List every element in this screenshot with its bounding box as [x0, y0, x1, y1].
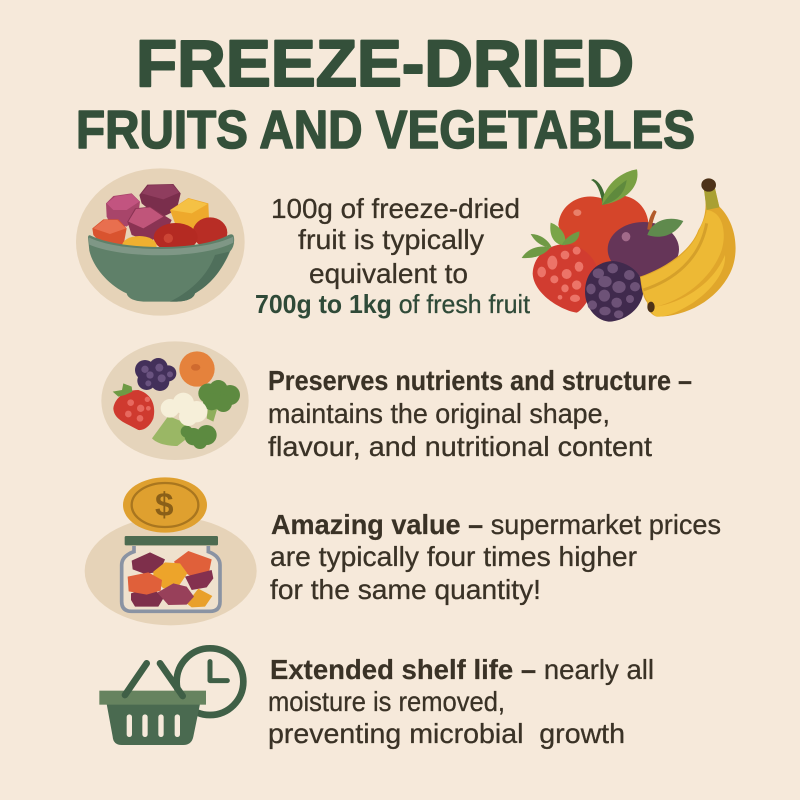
- text block: amazing value: for the same quantity!: [270, 574, 541, 605]
- text block: extended shelf life: preventing microbial growth: [268, 718, 625, 749]
- text block: weight equivalence: equivalent to: [309, 258, 468, 289]
- text block: amazing value: are typically four times higher: [270, 541, 637, 572]
- text block: weight equivalence: 700g to 1kg of fresh fruit: [255, 289, 531, 319]
- jar: [122, 536, 220, 611]
- text block: weight equivalence: 100g of freeze-dried: [271, 193, 520, 224]
- text block: amazing value: [270, 509, 721, 605]
- text block: preserves nutrients: Preserves nutrients and structure –: [268, 365, 692, 396]
- title: [76, 26, 695, 160]
- text block: weight equivalence: fruit is typically: [298, 224, 484, 255]
- text block: preserves nutrients: maintains the original shape,: [268, 398, 610, 429]
- text block: extended shelf life: Extended shelf life – nearly all: [270, 654, 654, 685]
- icon: vegetable and berry plate: [101, 341, 249, 460]
- strawberry: [522, 223, 597, 313]
- text block: amazing value: Amazing value – supermarket prices: [271, 509, 721, 540]
- text block: weight equivalence: [255, 193, 531, 319]
- icon: basket with clock: [99, 648, 243, 745]
- text block: extended shelf life: moisture is removed,: [268, 686, 505, 717]
- title: FRUITS AND VEGETABLES: [76, 100, 695, 160]
- text block: extended shelf life: [268, 654, 654, 749]
- coin: [123, 477, 207, 533]
- apple: [558, 169, 650, 270]
- title: FREEZE-DRIED: [136, 26, 634, 100]
- icon: bowl of freeze-dried fruit: [76, 168, 245, 316]
- blackberry: [585, 261, 643, 322]
- coin: $: [155, 487, 174, 524]
- banana: [640, 178, 736, 317]
- basket: [99, 663, 206, 745]
- clock: [177, 648, 243, 715]
- icon: jar with coin: [85, 477, 257, 625]
- text block: preserves nutrients: flavour, and nutritional content: [268, 431, 652, 462]
- icon: fresh fruit group: [522, 169, 736, 322]
- text block: preserves nutrients: [268, 365, 692, 462]
- plum: [608, 210, 683, 277]
